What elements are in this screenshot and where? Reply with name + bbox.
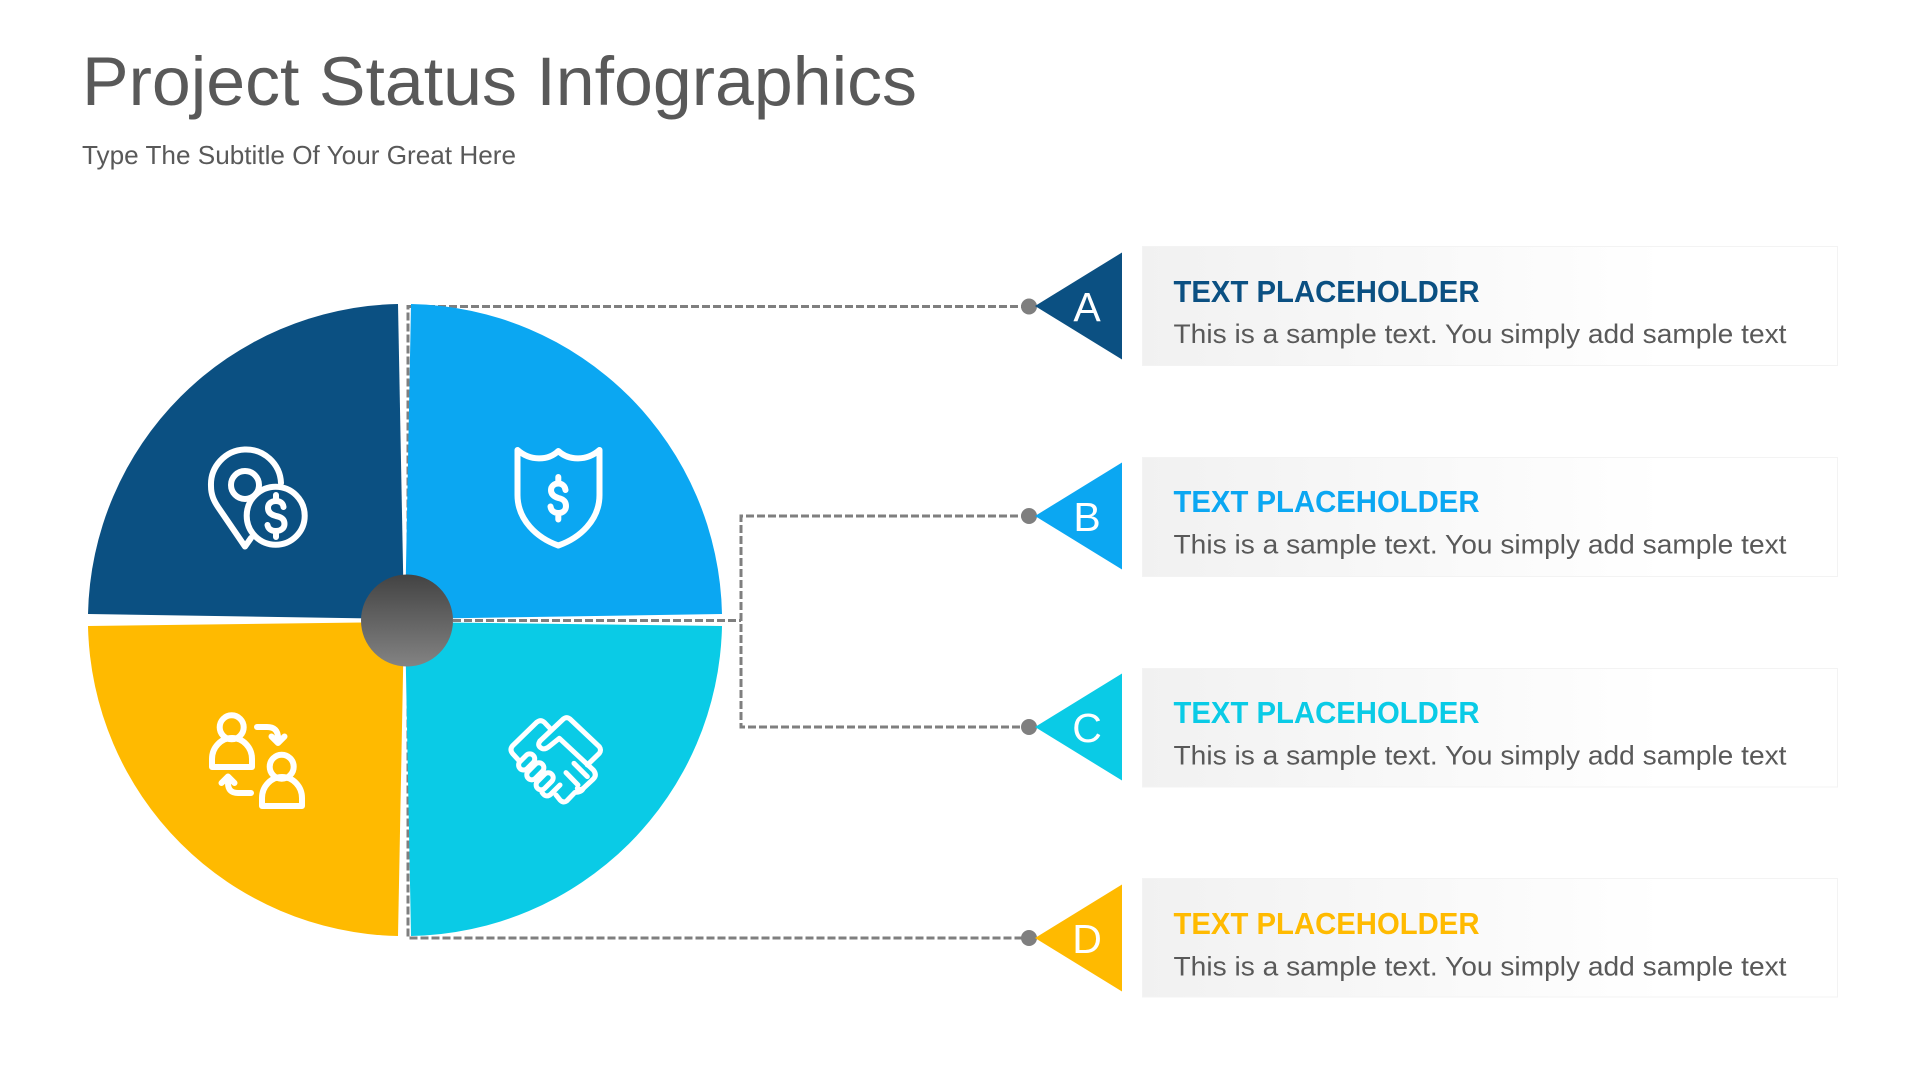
connector dot C [1021, 719, 1037, 735]
title: Project Status Infographics [82, 43, 917, 120]
item A [1021, 246, 1838, 366]
center hub [361, 574, 453, 666]
panel D [1142, 878, 1838, 997]
connector dot B [1021, 508, 1037, 524]
heading C: TEXT PLACEHOLDER [1174, 696, 1480, 730]
slice C: teal [405, 622, 722, 936]
item D [1021, 878, 1838, 997]
slice D: yellow [88, 622, 404, 936]
icon: location pin with dollar coin [211, 449, 305, 546]
dashed connectors [408, 306, 1029, 938]
triangle C [1035, 674, 1122, 780]
item B [1021, 458, 1838, 576]
triangle D [1035, 884, 1122, 992]
connector dot A [1021, 298, 1037, 314]
text A: This is a sample text. You simply add sample text [1174, 319, 1787, 349]
text B: This is a sample text. You simply add sample text [1174, 530, 1787, 560]
panel C [1142, 668, 1838, 787]
heading D: TEXT PLACEHOLDER [1174, 907, 1480, 941]
icon: handshake [511, 718, 600, 802]
connector dot D [1021, 930, 1037, 946]
letter C: C [1072, 705, 1102, 751]
text D: This is a sample text. You simply add sample text [1174, 952, 1787, 982]
heading B: TEXT PLACEHOLDER [1174, 485, 1480, 519]
icon: people exchange [212, 715, 302, 806]
subtitle: Type The Subtitle Of Your Great Here [82, 140, 516, 170]
panel B [1142, 458, 1838, 576]
triangle A [1035, 252, 1122, 360]
slice A: dark blue [88, 304, 404, 619]
text C: This is a sample text. You simply add sample text [1174, 740, 1787, 770]
letter A: A [1073, 284, 1101, 330]
item C [1021, 668, 1838, 787]
slice B: light blue [405, 304, 722, 619]
icon: shield with dollar [518, 450, 600, 546]
triangle B [1035, 462, 1122, 570]
panel: pie chart [88, 304, 722, 936]
letter B: B [1073, 494, 1101, 540]
letter D: D [1072, 916, 1102, 962]
heading A: TEXT PLACEHOLDER [1174, 275, 1480, 309]
panel A [1142, 246, 1838, 366]
